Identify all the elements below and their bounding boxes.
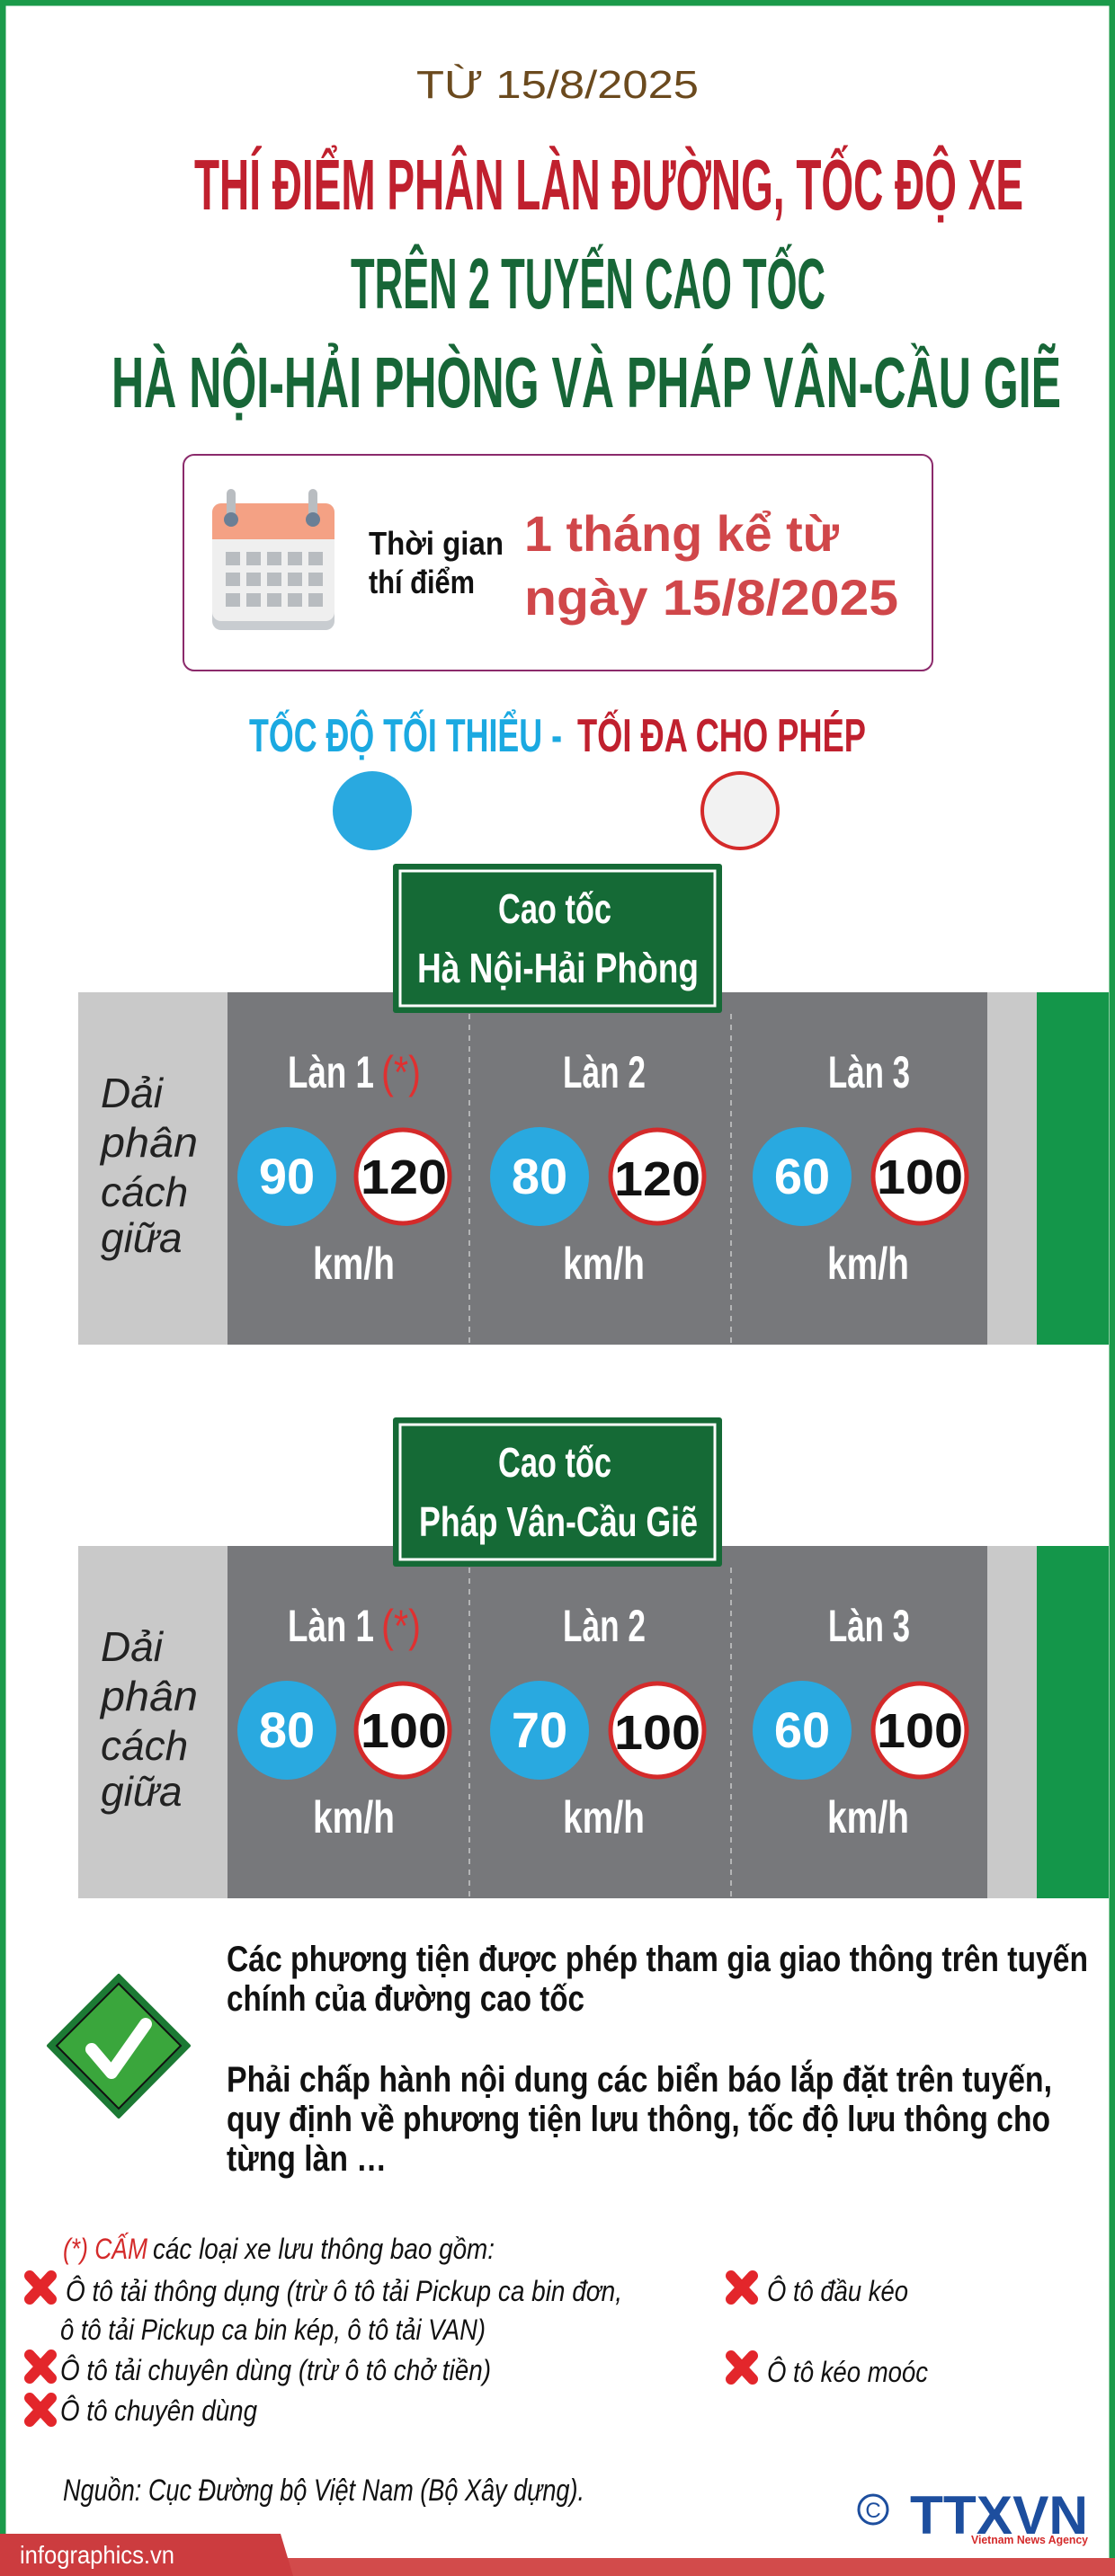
median label: Dải: [101, 1070, 165, 1116]
panel: Phap Van - Cau Gie road: [78, 1417, 1109, 1898]
icons: red crosses: [30, 2276, 753, 2421]
lanes: Làn 3: [828, 1047, 910, 1097]
icon: green check diamond: [49, 1976, 189, 2117]
speed signs: 120: [361, 1150, 447, 1204]
logo: TTXVN: C: [865, 2499, 881, 2523]
label: trial time: thí điểm: [369, 564, 475, 600]
median label: phân: [99, 1119, 198, 1166]
speed signs: 70: [512, 1701, 567, 1758]
legend heading: TỐI ĐA CHO PHÉP: [577, 709, 866, 762]
speed signs: 60: [774, 1701, 830, 1758]
speed signs: 100: [361, 1704, 447, 1758]
sign: Ha Noi - Hai Phong: [393, 864, 722, 1013]
ban list: Ô tô tải thông dụng (trừ ô tô tải Pickup ca bin đơn,: [66, 2275, 622, 2307]
text: must comply: từng làn …: [227, 2139, 387, 2179]
lanes: (*): [381, 1047, 421, 1097]
ban list: Ô tô đầu kéo: [767, 2275, 908, 2307]
ban list: ô tô tải Pickup ca bin kép, ô tô tải VAN): [60, 2314, 486, 2346]
value: 1 month from 15/8/2025: [524, 505, 898, 626]
label: trial time: [369, 525, 504, 600]
ban list: (*) CẤM: [63, 2233, 147, 2265]
lanes: km/h: [827, 1239, 909, 1289]
logo: TTXVN: Vietnam News Agency: [971, 2533, 1089, 2546]
speed signs: [237, 1127, 967, 1226]
legend: max speed circle: [702, 773, 778, 848]
median label: giữa: [101, 1768, 183, 1815]
text: must comply: [227, 2058, 1052, 2179]
speed signs: 100: [877, 1150, 963, 1204]
lanes: km/h: [313, 1792, 395, 1843]
lanes: km/h: [313, 1239, 395, 1289]
median label: cách: [101, 1168, 188, 1215]
text: allowed vehicles: [227, 1940, 1088, 2019]
source: Nguồn: Cục Đường bộ Việt Nam (Bộ Xây dựng).: [63, 2474, 584, 2508]
speed signs: 100: [614, 1706, 700, 1760]
legend heading: TỐC ĐỘ TỐI THIỂU -: [249, 709, 562, 762]
footer bar: [0, 2534, 1115, 2576]
sign: Ha Noi - Hai Phong: Hà Nội-Hải Phòng: [417, 945, 699, 991]
sign: Phap Van - Cau Gie: Pháp Vân-Cầu Giẽ: [419, 1498, 698, 1545]
lanes: Làn 2: [563, 1047, 646, 1097]
label: trial time: Thời gian: [369, 525, 504, 562]
lanes: Làn 3: [828, 1601, 910, 1651]
lanes: km/h: [563, 1792, 645, 1843]
ban list: [60, 2233, 928, 2427]
sign: Phap Van - Cau Gie: [393, 1417, 722, 1567]
speed signs: [237, 1681, 967, 1780]
lanes: km/h: [827, 1792, 909, 1843]
lanes: (*): [381, 1601, 421, 1651]
footer bar: infographics.vn: [20, 2541, 174, 2569]
speed signs: 120: [614, 1152, 700, 1206]
median label: cách: [101, 1722, 188, 1769]
lanes: Làn 1: [288, 1047, 374, 1097]
lanes: Làn 1: [288, 1601, 374, 1651]
lanes: Làn 2: [563, 1601, 646, 1651]
lanes: km/h: [563, 1239, 645, 1289]
icon: calendar: [212, 489, 334, 630]
value: 1 month from 15/8/2025: ngày 15/8/2025: [524, 569, 898, 626]
speed signs: 80: [512, 1148, 567, 1204]
speed signs: 80: [259, 1701, 315, 1758]
sign: Ha Noi - Hai Phong: Cao tốc: [498, 885, 611, 932]
median label: [99, 1070, 198, 1261]
lanes: [288, 1601, 910, 1843]
subtitle date: TỪ 15/8/2025: [416, 63, 699, 107]
legend: min speed circle: [333, 771, 412, 850]
median label: giữa: [101, 1214, 183, 1261]
median label: [99, 1623, 198, 1815]
ban list: Ô tô tải chuyên dùng (trừ ô tô chở tiền): [60, 2354, 491, 2386]
panel: Ha Noi - Hai Phong road: [78, 864, 1109, 1345]
panel: trial period: [183, 455, 932, 671]
speed signs: 100: [877, 1704, 963, 1758]
title: [112, 145, 1061, 422]
ban list: Ô tô chuyên dùng: [60, 2394, 257, 2427]
ban list: Ô tô kéo moóc: [767, 2356, 928, 2388]
text: allowed vehicles: chính của đường cao tốc: [227, 1979, 584, 2019]
lanes: [288, 1047, 910, 1289]
median label: phân: [99, 1673, 198, 1719]
speed signs: 60: [774, 1148, 830, 1204]
logo: TTXVN: TTXVN: [910, 2485, 1088, 2545]
median label: Dải: [101, 1623, 165, 1670]
speed signs: 90: [259, 1148, 315, 1204]
value: 1 month from 15/8/2025: 1 tháng kể từ: [524, 505, 839, 562]
sign: Phap Van - Cau Gie: Cao tốc: [498, 1439, 611, 1486]
ban list: các loại xe lưu thông bao gồm:: [153, 2233, 495, 2265]
